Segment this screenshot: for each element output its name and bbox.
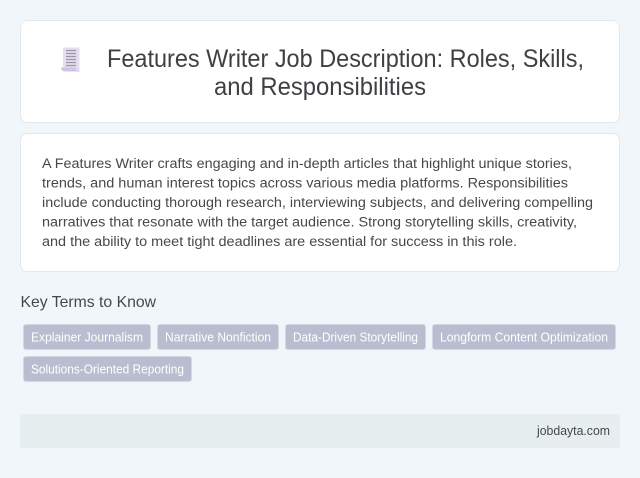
- heading: key terms: Key Terms to Know: [20, 294, 156, 311]
- text block: description: trends, and human interest topics across various media platforms. Responsibilities: [42, 176, 568, 192]
- tag: Narrative Nonfiction: Narrative Nonfiction: [165, 330, 271, 344]
- title: [107, 45, 584, 101]
- footer bar: [20, 414, 620, 448]
- tag: Solutions-Oriented Reporting: [24, 356, 192, 382]
- text block: description: include conducting thorough research, interviewing subjects, and delivering compelling: [42, 195, 593, 211]
- tag: Narrative Nonfiction: [158, 324, 278, 350]
- tag: Data-Driven Storytelling: Data-Driven Storytelling: [293, 330, 418, 344]
- text block: description: narratives that resonate with the target audience. Strong storytelling skills, creativity,: [42, 214, 577, 230]
- text block: description: [42, 156, 593, 250]
- text block: description: A Features Writer crafts engaging and in-depth articles that highlight unique stories,: [42, 156, 572, 172]
- tag: Solutions-Oriented Reporting: Solutions-Oriented Reporting: [31, 362, 184, 376]
- panel: description card: [20, 134, 620, 272]
- tag list: [24, 324, 616, 382]
- title: and Responsibilities: [214, 73, 426, 101]
- text block: description: and the ability to meet tight deadlines are essential for success in this role.: [42, 234, 517, 250]
- footer source: jobdayta.com: [536, 424, 610, 438]
- panel: title card: [20, 20, 620, 122]
- icon: document scroll: [61, 48, 80, 72]
- tag: Explainer Journalism: [24, 324, 150, 350]
- tag: Longform Content Optimization: [432, 324, 616, 350]
- tag: Longform Content Optimization: Longform Content Optimization: [440, 330, 608, 344]
- title: Features Writer Job Description: Roles, Skills,: [107, 45, 584, 73]
- tag: Data-Driven Storytelling: [286, 324, 426, 350]
- tag: Explainer Journalism: Explainer Journalism: [31, 330, 143, 344]
